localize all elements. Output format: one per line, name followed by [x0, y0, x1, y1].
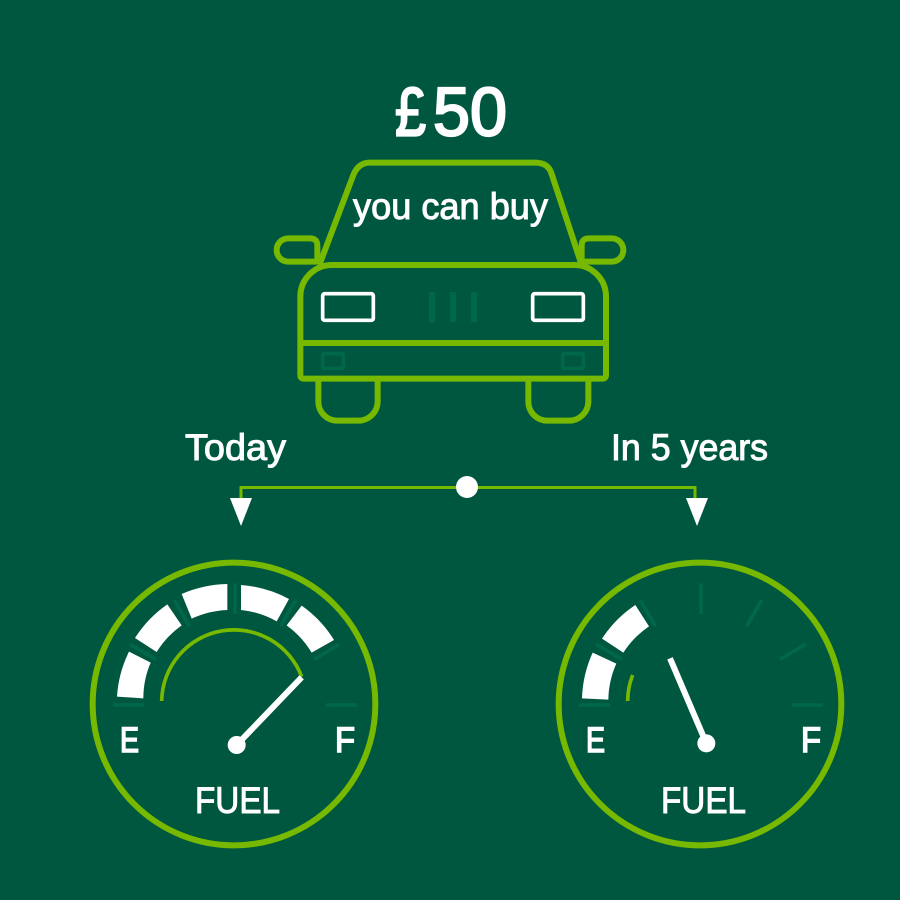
- green sweep arc: [628, 675, 633, 701]
- green sweep arc: [162, 630, 302, 701]
- needle: [237, 677, 302, 745]
- fuel level segments: [117, 584, 334, 698]
- needle hub: [228, 736, 246, 754]
- icon: car: [277, 163, 623, 421]
- needle hub: [697, 734, 715, 752]
- gauge rim: [559, 563, 841, 845]
- car left mirror: [277, 238, 317, 262]
- car grille: [429, 292, 477, 322]
- heading: £50: £: [395, 74, 426, 150]
- text: you can buy: you can buy: [353, 186, 548, 227]
- arrow: right: [686, 498, 708, 526]
- car windscreen: [319, 163, 582, 265]
- car right mirror: [582, 238, 623, 262]
- gauge ticks: [113, 583, 357, 705]
- gauge rim: [93, 563, 375, 845]
- connector dot: [456, 476, 478, 498]
- car body: [300, 265, 606, 379]
- heading: £50: 50: [433, 74, 507, 150]
- car left wheel: [318, 380, 378, 421]
- car left headlight: [323, 294, 373, 320]
- gauge in 5 years F label: F: [801, 721, 821, 760]
- gauge today F label: F: [335, 721, 355, 760]
- car right wheel: [528, 380, 588, 421]
- connector line: [241, 488, 695, 500]
- gauge today FUEL label: FUEL: [195, 780, 280, 821]
- label: Today: Today: [185, 427, 287, 468]
- gauge today E label: E: [120, 721, 139, 760]
- car left fog lamp: [323, 354, 343, 368]
- fuel level segments: [582, 605, 649, 700]
- gauge: today: [93, 563, 375, 845]
- needle: [670, 658, 706, 743]
- gauge in 5 years E label: E: [586, 721, 605, 760]
- arrow: left: [230, 498, 252, 526]
- car right fog lamp: [563, 354, 583, 368]
- connector arrows: [230, 476, 708, 526]
- car right headlight: [533, 294, 583, 320]
- gauge in 5 years FUEL label: FUEL: [661, 780, 746, 821]
- gauge ticks: [579, 583, 823, 705]
- label: In 5 years: In 5 years: [611, 427, 768, 468]
- heading: £50: [395, 74, 507, 150]
- gauge: in 5 years: [559, 563, 841, 845]
